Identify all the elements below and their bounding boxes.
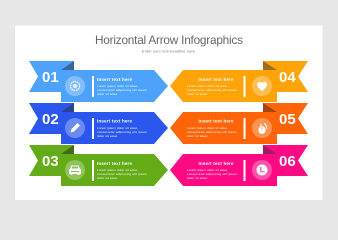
text 03 <box>97 161 148 180</box>
text 03: Lorem ipsum dolor sit amet, <box>97 168 138 172</box>
text 01: Insert text here <box>97 77 132 82</box>
text 04: Insert text here <box>198 77 234 82</box>
icon: car <box>65 160 85 180</box>
fold 01 <box>61 61 74 70</box>
panel: item 03 <box>29 145 168 186</box>
text 02: dolor sit amet. <box>97 134 118 138</box>
icon: network <box>65 76 85 96</box>
text 05: dolor sit amet. <box>187 134 208 138</box>
panel: item 04 <box>170 61 308 102</box>
subtitle: Enter your sub headline here <box>142 50 195 54</box>
text 06 <box>187 161 238 180</box>
title: Horizontal Arrow Infographics <box>95 33 243 47</box>
fold 05 <box>263 103 277 112</box>
ribbon 06 <box>263 145 308 176</box>
ribbon 05 <box>263 103 308 134</box>
divider bar 05 <box>244 118 246 139</box>
text 03: consectetur adipiscing elit ipsum <box>97 172 148 176</box>
arrow body 06 <box>170 154 277 186</box>
fold 04 <box>263 61 277 70</box>
number 01: 01 <box>42 69 59 86</box>
ribbon 01 <box>29 61 74 92</box>
arrow body 03 <box>61 154 168 186</box>
number 04: 04 <box>279 69 296 86</box>
ribbon 04 <box>263 61 308 92</box>
fold 03 <box>61 145 74 154</box>
panel: item 02 <box>29 103 168 144</box>
divider bar 04 <box>244 76 246 97</box>
arrow body 01 <box>61 70 168 102</box>
ribbon 03 <box>29 145 74 176</box>
text 05: consectetur adipiscing elit ipsum <box>187 130 238 134</box>
text 05 <box>187 118 238 138</box>
divider bar 06 <box>244 160 246 181</box>
text 01: dolor sit amet. <box>97 92 118 96</box>
text 06: consectetur adipiscing elit ipsum <box>187 172 238 176</box>
panel: item 06 <box>170 145 308 186</box>
number 03: 03 <box>42 153 59 170</box>
panel: item 01 <box>29 61 168 102</box>
text 03: dolor sit amet. <box>97 176 118 180</box>
text 04: dolor sit amet. <box>187 92 208 96</box>
icon: pencil <box>65 118 85 138</box>
text 04: Lorem ipsum dolor sit amet, <box>187 84 228 88</box>
text 04 <box>187 77 238 96</box>
text 02 <box>97 118 148 138</box>
panel: item 05 <box>170 103 308 144</box>
text 02: consectetur adipiscing elit ipsum <box>97 130 148 134</box>
text 01 <box>97 77 148 96</box>
icon: mouse <box>252 118 272 138</box>
icon: heart <box>252 76 272 96</box>
ribbon 02 <box>29 103 74 134</box>
arrow body 05 <box>170 112 277 144</box>
text 05: Insert text here <box>198 118 234 124</box>
text 06: dolor sit amet. <box>187 176 208 180</box>
text 03: Insert text here <box>97 161 132 166</box>
arrow body 04 <box>170 70 277 102</box>
fold 02 <box>61 103 74 112</box>
fold 06 <box>263 145 277 154</box>
text 02: Insert text here <box>97 118 132 124</box>
text 01: consectetur adipiscing elit ipsum <box>97 88 148 92</box>
number 05: 05 <box>279 111 296 128</box>
text 06: Lorem ipsum dolor sit amet, <box>187 168 228 172</box>
text 04: consectetur adipiscing elit ipsum <box>187 88 238 92</box>
text 06: Insert text here <box>198 161 234 166</box>
slide panel <box>15 26 322 200</box>
text 01: Lorem ipsum dolor sit amet, <box>97 84 138 88</box>
number 02: 02 <box>42 111 59 128</box>
divider bar 03 <box>92 160 94 181</box>
divider bar 02 <box>92 118 94 139</box>
text 05: Lorem ipsum dolor sit amet, <box>187 126 228 130</box>
number 06: 06 <box>279 153 296 170</box>
arrow body 02 <box>61 112 168 144</box>
icon: badge <box>252 160 272 180</box>
divider bar 01 <box>92 76 94 97</box>
text 02: Lorem ipsum dolor sit amet, <box>97 126 138 130</box>
